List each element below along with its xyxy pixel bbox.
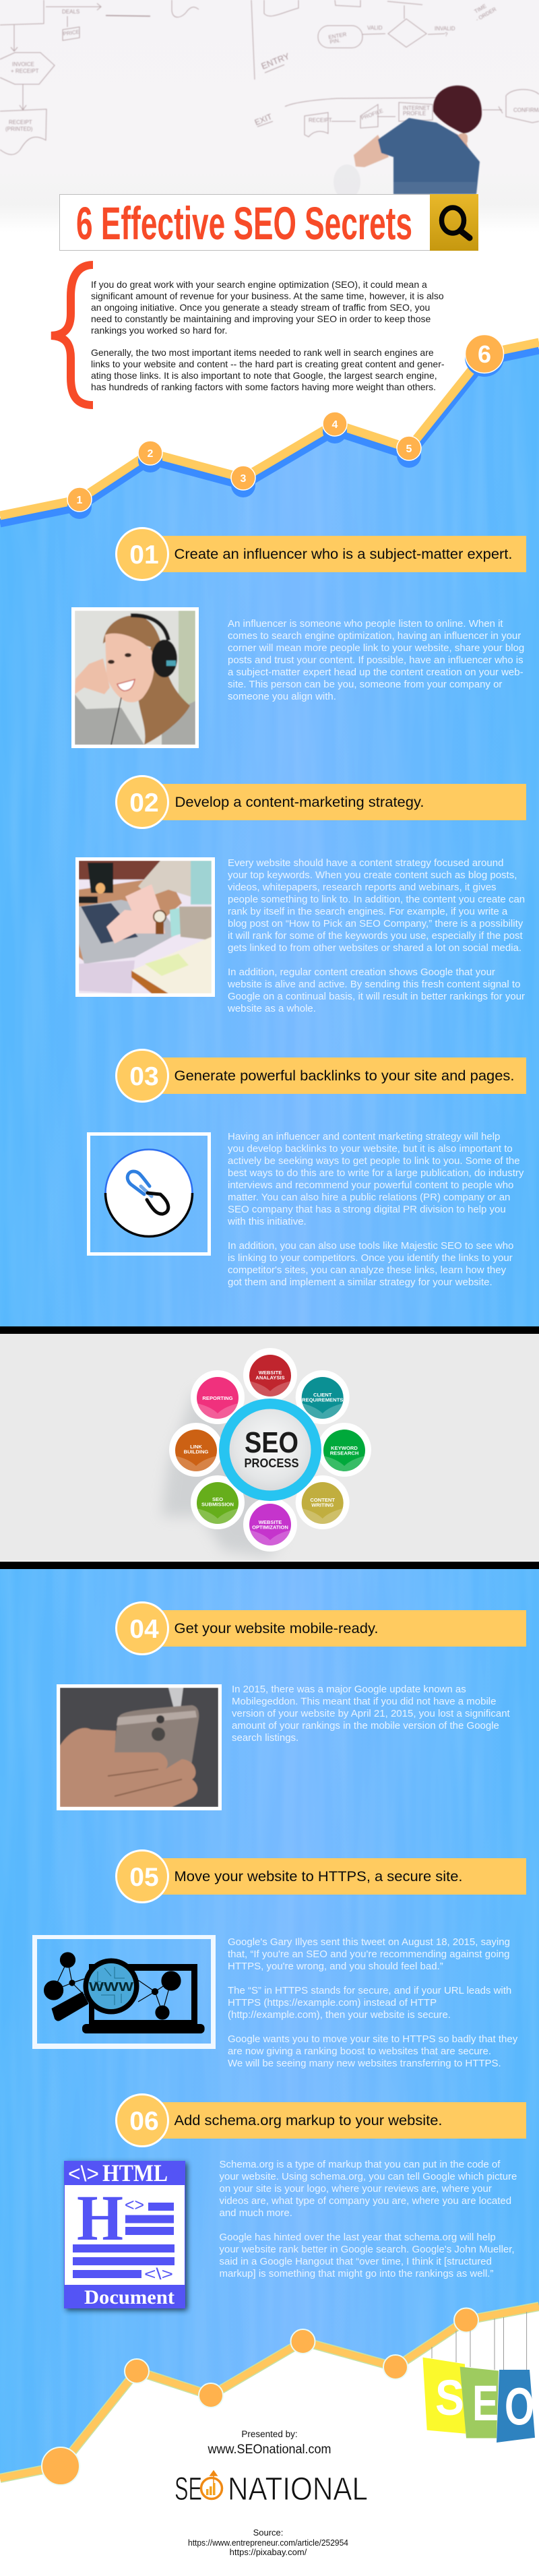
intro text: an ongoing initiative. Once you generate a steady stream of traffic from SEO, you bbox=[91, 302, 430, 313]
item: content writing: CONTENT bbox=[310, 1497, 335, 1503]
text: section 05: HTTPS, you're wrong, and you should feel bad.” bbox=[228, 1961, 443, 1972]
point 1 bbox=[67, 487, 92, 512]
section 02 heading: 02 bbox=[129, 789, 159, 818]
blue panel: upper section bbox=[0, 349, 539, 1326]
text: section 06: Schema.org is a type of markup that you can put in the code of bbox=[220, 2159, 501, 2170]
black divider top bbox=[0, 1326, 539, 1334]
section 03 heading bbox=[116, 1050, 526, 1101]
whiteboard flowchart sketches: INVALID bbox=[435, 26, 455, 32]
red curly brace bbox=[51, 265, 93, 405]
photo: hand holding phone bbox=[57, 1684, 222, 1810]
item: seo submission: SEO bbox=[212, 1496, 223, 1502]
source credits: Source: bbox=[253, 2527, 283, 2538]
text: section 03: is linking to your competitors. Once you identify the links to your bbox=[228, 1252, 513, 1264]
text: section 02: blog post on “How to Pick an SEO Company,” there is a possibility bbox=[228, 918, 524, 929]
person at whiteboard bbox=[334, 86, 482, 200]
HTML document icon: Document bbox=[84, 2286, 175, 2308]
whiteboard flowchart sketches: ENTRY bbox=[260, 51, 291, 71]
text: section 01: a subject-matter expert head up the content creation on your web- bbox=[228, 667, 524, 678]
text: section 04: Mobilegeddon. This meant that if you did not have a mobile bbox=[232, 1696, 496, 1707]
item: client requirements: REQUIREMENTS bbox=[302, 1397, 343, 1403]
network nodes bbox=[44, 1953, 181, 2019]
text: section 03: Having an influencer and content marketing strategy will help bbox=[228, 1131, 500, 1142]
section 01 heading: 01 bbox=[129, 541, 159, 570]
text: section 03: got them and implement a similar strategy for your website. bbox=[228, 1277, 493, 1288]
text: section 05: (http://example.com), then your website is secure. bbox=[228, 2009, 451, 2021]
point 3 bbox=[231, 466, 255, 490]
text: section 05: Google's Gary Illyes sent this tweet on August 18, 2015, saying bbox=[228, 1936, 510, 1948]
HTML document icon: <\> bbox=[68, 2161, 99, 2186]
text: section 01: comes to search engine optimization, having an influencer in your bbox=[228, 630, 521, 642]
text: section 03: interviews and recommend your powerful content to people who bbox=[228, 1179, 513, 1191]
intro text: ating those links. It is also important to note that Google, the largest search engine, bbox=[91, 370, 437, 381]
text: section 06 bbox=[220, 2159, 517, 2279]
intro text: links to your website and content -- the hard part is creating great content and gener- bbox=[91, 359, 445, 369]
hanging SEO tags: S bbox=[435, 2370, 464, 2426]
text: section 02: website as a whole. bbox=[227, 1003, 316, 1014]
text: section 01: site. This person can be you, someone from your company or bbox=[228, 679, 502, 690]
point 4: 4 bbox=[332, 419, 338, 431]
text: section 02: people something to link to. In addition, the content you create can bbox=[228, 894, 525, 905]
intro text: rankings you worked so hard for. bbox=[91, 325, 227, 336]
magnifier bbox=[51, 1992, 89, 2021]
text: section 04 bbox=[232, 1684, 511, 1744]
text: section 05: that, “If you're an SEO and you're recommending against going bbox=[228, 1949, 509, 1960]
text: section 03: matter. You can also hire a public relations (PR) company or an bbox=[228, 1192, 510, 1203]
item: website analysis: WEBSITE bbox=[259, 1370, 282, 1376]
whiteboard flowchart sketches: PRICE bbox=[63, 29, 80, 37]
rising line chart with numbered points bbox=[0, 334, 539, 523]
text: section 02: rank by itself in the search engines. For example, if you write a bbox=[228, 906, 508, 917]
text: section 02: gets linked to from other websites or shared a lot on social media. bbox=[228, 942, 521, 954]
hanging SEO tags: E bbox=[472, 2375, 499, 2431]
whiteboard flowchart sketches bbox=[0, 0, 539, 154]
text: section 02 bbox=[227, 857, 525, 1014]
text: section 02: Every website should have a content strategy focused around bbox=[228, 857, 503, 869]
text: section 02: In addition, regular content creation shows Google that your bbox=[228, 967, 495, 978]
bottom line chart bbox=[0, 2306, 539, 2485]
text: section 06: your website rank better in Google search. Google's John Mueller, bbox=[220, 2244, 515, 2255]
text: section 06: your website. Using schema.org, you can tell Google which picture bbox=[220, 2171, 517, 2182]
item: keyword research bbox=[317, 1423, 371, 1477]
text: section 04: amount of your rankings in the mobile version of the Google bbox=[232, 1720, 499, 1731]
website url: www.SEOnational.com bbox=[208, 2443, 331, 2457]
HTML document icon: HTML bbox=[102, 2159, 168, 2186]
item: link building: LINK bbox=[190, 1444, 202, 1450]
text: section 01: posts and trust your content. If possible, have an influencer who is bbox=[228, 654, 524, 666]
item: content writing bbox=[296, 1475, 350, 1529]
item: reporting bbox=[191, 1370, 245, 1424]
text: section 03 bbox=[227, 1131, 524, 1288]
item: seo submission: SUBMISSION bbox=[201, 1502, 234, 1507]
whiteboard flowchart sketches: TIME bbox=[473, 3, 488, 15]
section 05 heading: Move your website to HTTPS, a secure site. bbox=[174, 1869, 462, 1884]
whiteboard flowchart sketches: DEALS bbox=[62, 9, 80, 15]
upper panel wood texture bbox=[0, 337, 539, 1328]
text: section 06: on your site is your logo, where your reviews are, where your bbox=[220, 2183, 492, 2195]
text: section 02: it will rank for some of the keywords you use, especially if the post bbox=[228, 930, 524, 942]
text: section 02: your top keywords. When you create content such as blog posts, bbox=[228, 869, 517, 881]
section 04 heading: Get your website mobile-ready. bbox=[174, 1621, 379, 1636]
item: client requirements bbox=[296, 1370, 350, 1424]
text: section 05: We will be seeing many new websites transferring to HTTPS. bbox=[228, 2058, 501, 2069]
text: section 05: Google wants you to move your site to HTTPS so badly that they bbox=[228, 2033, 518, 2045]
intro text: has hundreds of ranking factors with some factors having more weight than others. bbox=[91, 381, 436, 392]
point 5 bbox=[397, 436, 421, 460]
item: reporting: REPORTING bbox=[202, 1395, 233, 1401]
source credits: https://pixabay.com/ bbox=[230, 2547, 307, 2557]
intro text: If you do great work with your search engine optimization (SEO), it could mean a bbox=[91, 279, 427, 290]
text: section 06: Google has hinted over the last year that schema.org will help bbox=[220, 2232, 496, 2243]
point 2: 2 bbox=[148, 448, 154, 460]
HTML document icon: <\> bbox=[144, 2265, 173, 2283]
text: section 01: corner will mean more people link to your website, share your blog bbox=[228, 642, 524, 654]
text: section 05: HTTPS (https://example.com) instead of HTTP bbox=[228, 1997, 437, 2008]
title search bar bbox=[59, 194, 478, 251]
point 5: 5 bbox=[406, 443, 412, 455]
text: section 03: competitor's sites, you can analyze these links, learn how they bbox=[228, 1264, 507, 1276]
intro text bbox=[91, 279, 445, 392]
text: section 03: actively be seeking ways to get people to link to you. Some of the bbox=[228, 1155, 520, 1167]
source credits: https://www.entrepreneur.com/article/252954 bbox=[188, 2538, 348, 2548]
section 03 heading: 03 bbox=[129, 1062, 159, 1091]
point 6 bbox=[465, 334, 504, 373]
photo: woman with headphones bbox=[71, 607, 199, 748]
SEO National logo: SE bbox=[175, 2472, 202, 2507]
text: section 02: website is alive and active. By sending this fresh content signal to bbox=[227, 979, 520, 990]
panel: SEO process bbox=[0, 1334, 539, 1562]
point 4 bbox=[323, 412, 347, 436]
blue panel: lower section bbox=[0, 1569, 539, 2478]
text: section 02: Google on a continual basis, it will result in better rankings for your bbox=[228, 991, 525, 1002]
section 06 heading: 06 bbox=[129, 2107, 159, 2136]
item: website analysis: ANALAYSIS bbox=[255, 1375, 285, 1380]
item: link building: BUILDING bbox=[184, 1449, 208, 1454]
centre SEO process ring: SEO bbox=[245, 1426, 298, 1459]
item: website optimization: WEBSITE bbox=[259, 1519, 282, 1525]
section 01 heading: Create an influencer who is a subject-matter expert. bbox=[174, 547, 512, 562]
centre SEO process ring bbox=[219, 1399, 321, 1501]
text: section 06: videos are, what type of company you are, where you are located bbox=[220, 2195, 511, 2207]
centre SEO process ring: PROCESS bbox=[244, 1456, 299, 1470]
whiteboard flowchart sketches: PROFILE bbox=[360, 108, 384, 121]
point 6: 6 bbox=[478, 340, 491, 368]
text: section 03: SEO company that has a strong digital PR division to help you bbox=[228, 1204, 506, 1215]
text: section 04: In 2015, there was a major Google update known as bbox=[232, 1684, 466, 1695]
presented by: Presented by: bbox=[241, 2429, 298, 2439]
text: section 02: videos, whitepapers, research reports and webinars, it gives bbox=[228, 882, 497, 893]
item: content writing: WRITING bbox=[311, 1502, 334, 1508]
section 06 heading: Add schema.org markup to your website. bbox=[174, 2113, 442, 2128]
search button with magnifier icon bbox=[430, 194, 478, 251]
item: website analysis bbox=[243, 1348, 297, 1402]
framed chain link icon bbox=[89, 1134, 209, 1254]
text: section 06: and much more. bbox=[220, 2207, 292, 2219]
whiteboard flowchart sketches: EXIT bbox=[253, 112, 274, 127]
section 04 heading bbox=[116, 1603, 526, 1654]
item: keyword research: KEYWORD bbox=[331, 1445, 358, 1451]
intro text: Generally, the two most important items needed to rank well in search engines are bbox=[91, 347, 434, 358]
whiteboard flowchart sketches: (PRINTED) bbox=[5, 126, 33, 132]
whiteboard flowchart sketches: + RECEIPT bbox=[11, 68, 39, 74]
section 03 heading: Generate powerful backlinks to your site and pages. bbox=[174, 1068, 515, 1084]
whiteboard flowchart sketches: RECEIPT bbox=[309, 117, 332, 123]
text: section 04: search listings. bbox=[232, 1732, 298, 1744]
whiteboard flowchart sketches: ? bbox=[445, 32, 448, 38]
section 02 heading: Develop a content-marketing strategy. bbox=[175, 795, 424, 810]
lower panel wood texture bbox=[0, 1569, 539, 2486]
framed www magnifier icon: WWW bbox=[89, 1980, 133, 1994]
HTML document icon bbox=[64, 2159, 187, 2310]
text: section 05: are now giving a ranking boost to websites that are secure. bbox=[228, 2046, 491, 2057]
source credits bbox=[188, 2527, 348, 2557]
text: section 05 bbox=[228, 1936, 518, 2069]
item: website optimization bbox=[243, 1498, 297, 1552]
framed www magnifier icon bbox=[32, 1935, 216, 2049]
text: section 03: you develop backlinks to your website, but it is also important to bbox=[228, 1143, 513, 1155]
HTML document icon: H bbox=[77, 2182, 123, 2254]
text: section 03: In addition, you can also use tools like Majestic SEO to see who bbox=[228, 1240, 513, 1252]
section 02 heading bbox=[116, 776, 526, 828]
section 06 heading bbox=[116, 2095, 526, 2146]
chain link glyph bbox=[127, 1171, 168, 1214]
text: section 05: The “S” in HTTPS stands for secure, and if your URL leads with bbox=[228, 1985, 511, 1996]
hanging SEO tags bbox=[423, 2312, 535, 2443]
point 2 bbox=[138, 441, 162, 465]
whiteboard flowchart sketches: VALID bbox=[367, 25, 383, 31]
item: seo submission bbox=[191, 1475, 245, 1529]
text: section 03: best ways to do this are to write for a large publication, do industry bbox=[228, 1167, 524, 1179]
text: section 04: version of your website by April 21, 2015, you lost a significant bbox=[232, 1708, 511, 1719]
point 1: 1 bbox=[77, 495, 83, 506]
whiteboard flowchart sketches: - ORDER bbox=[474, 6, 497, 23]
whiteboard flowchart sketches: PROFILE bbox=[403, 111, 426, 117]
section 05 heading: 05 bbox=[129, 1863, 159, 1892]
item: link building bbox=[169, 1423, 223, 1477]
soft shadows bbox=[162, 1388, 283, 1557]
whiteboard flowchart sketches: PIN. bbox=[329, 37, 341, 45]
photo: hands typing on laptop bbox=[75, 857, 215, 997]
whiteboard flowchart sketches: INTERNET bbox=[403, 105, 430, 111]
item: client requirements: CLIENT bbox=[313, 1392, 332, 1398]
text: section 03: with this initiative. bbox=[227, 1216, 307, 1227]
whiteboard flowchart sketches: ENTER bbox=[328, 31, 347, 40]
laptop outline bbox=[89, 1964, 197, 2024]
text: section 06: said in a Google Hangout that “over time, I think it [structured bbox=[220, 2256, 492, 2267]
section 01 heading bbox=[116, 528, 526, 580]
whiteboard flowchart sketches: INVOICE bbox=[12, 61, 34, 67]
item: website optimization: OPTIMIZATION bbox=[252, 1525, 288, 1530]
intro text: significant amount of revenue for your business. At the same time, however, it is also bbox=[91, 290, 444, 301]
hero whiteboard photo bbox=[0, 0, 539, 233]
text: section 01 bbox=[228, 618, 524, 702]
text: section 01: someone you align with. bbox=[228, 691, 336, 702]
black divider bottom bbox=[0, 1562, 539, 1569]
point 3: 3 bbox=[241, 473, 247, 485]
HTML document icon: <> bbox=[125, 2195, 144, 2215]
section 04 heading: 04 bbox=[129, 1615, 159, 1644]
section 05 heading bbox=[116, 1851, 526, 1902]
whiteboard flowchart sketches: RECEIPT bbox=[9, 119, 32, 125]
item: keyword research: RESEARCH bbox=[330, 1450, 358, 1456]
text: section 01: An influencer is someone who people listen to online. When it bbox=[228, 618, 503, 630]
text: section 06: markup] is something that might go into the rankings as well.” bbox=[220, 2268, 493, 2279]
intro text: need to constantly be maintaining and improving your SEO in order to keep those bbox=[91, 313, 431, 324]
SEO National logo bbox=[175, 2471, 368, 2507]
SEO National logo: NATIONAL bbox=[228, 2472, 368, 2507]
